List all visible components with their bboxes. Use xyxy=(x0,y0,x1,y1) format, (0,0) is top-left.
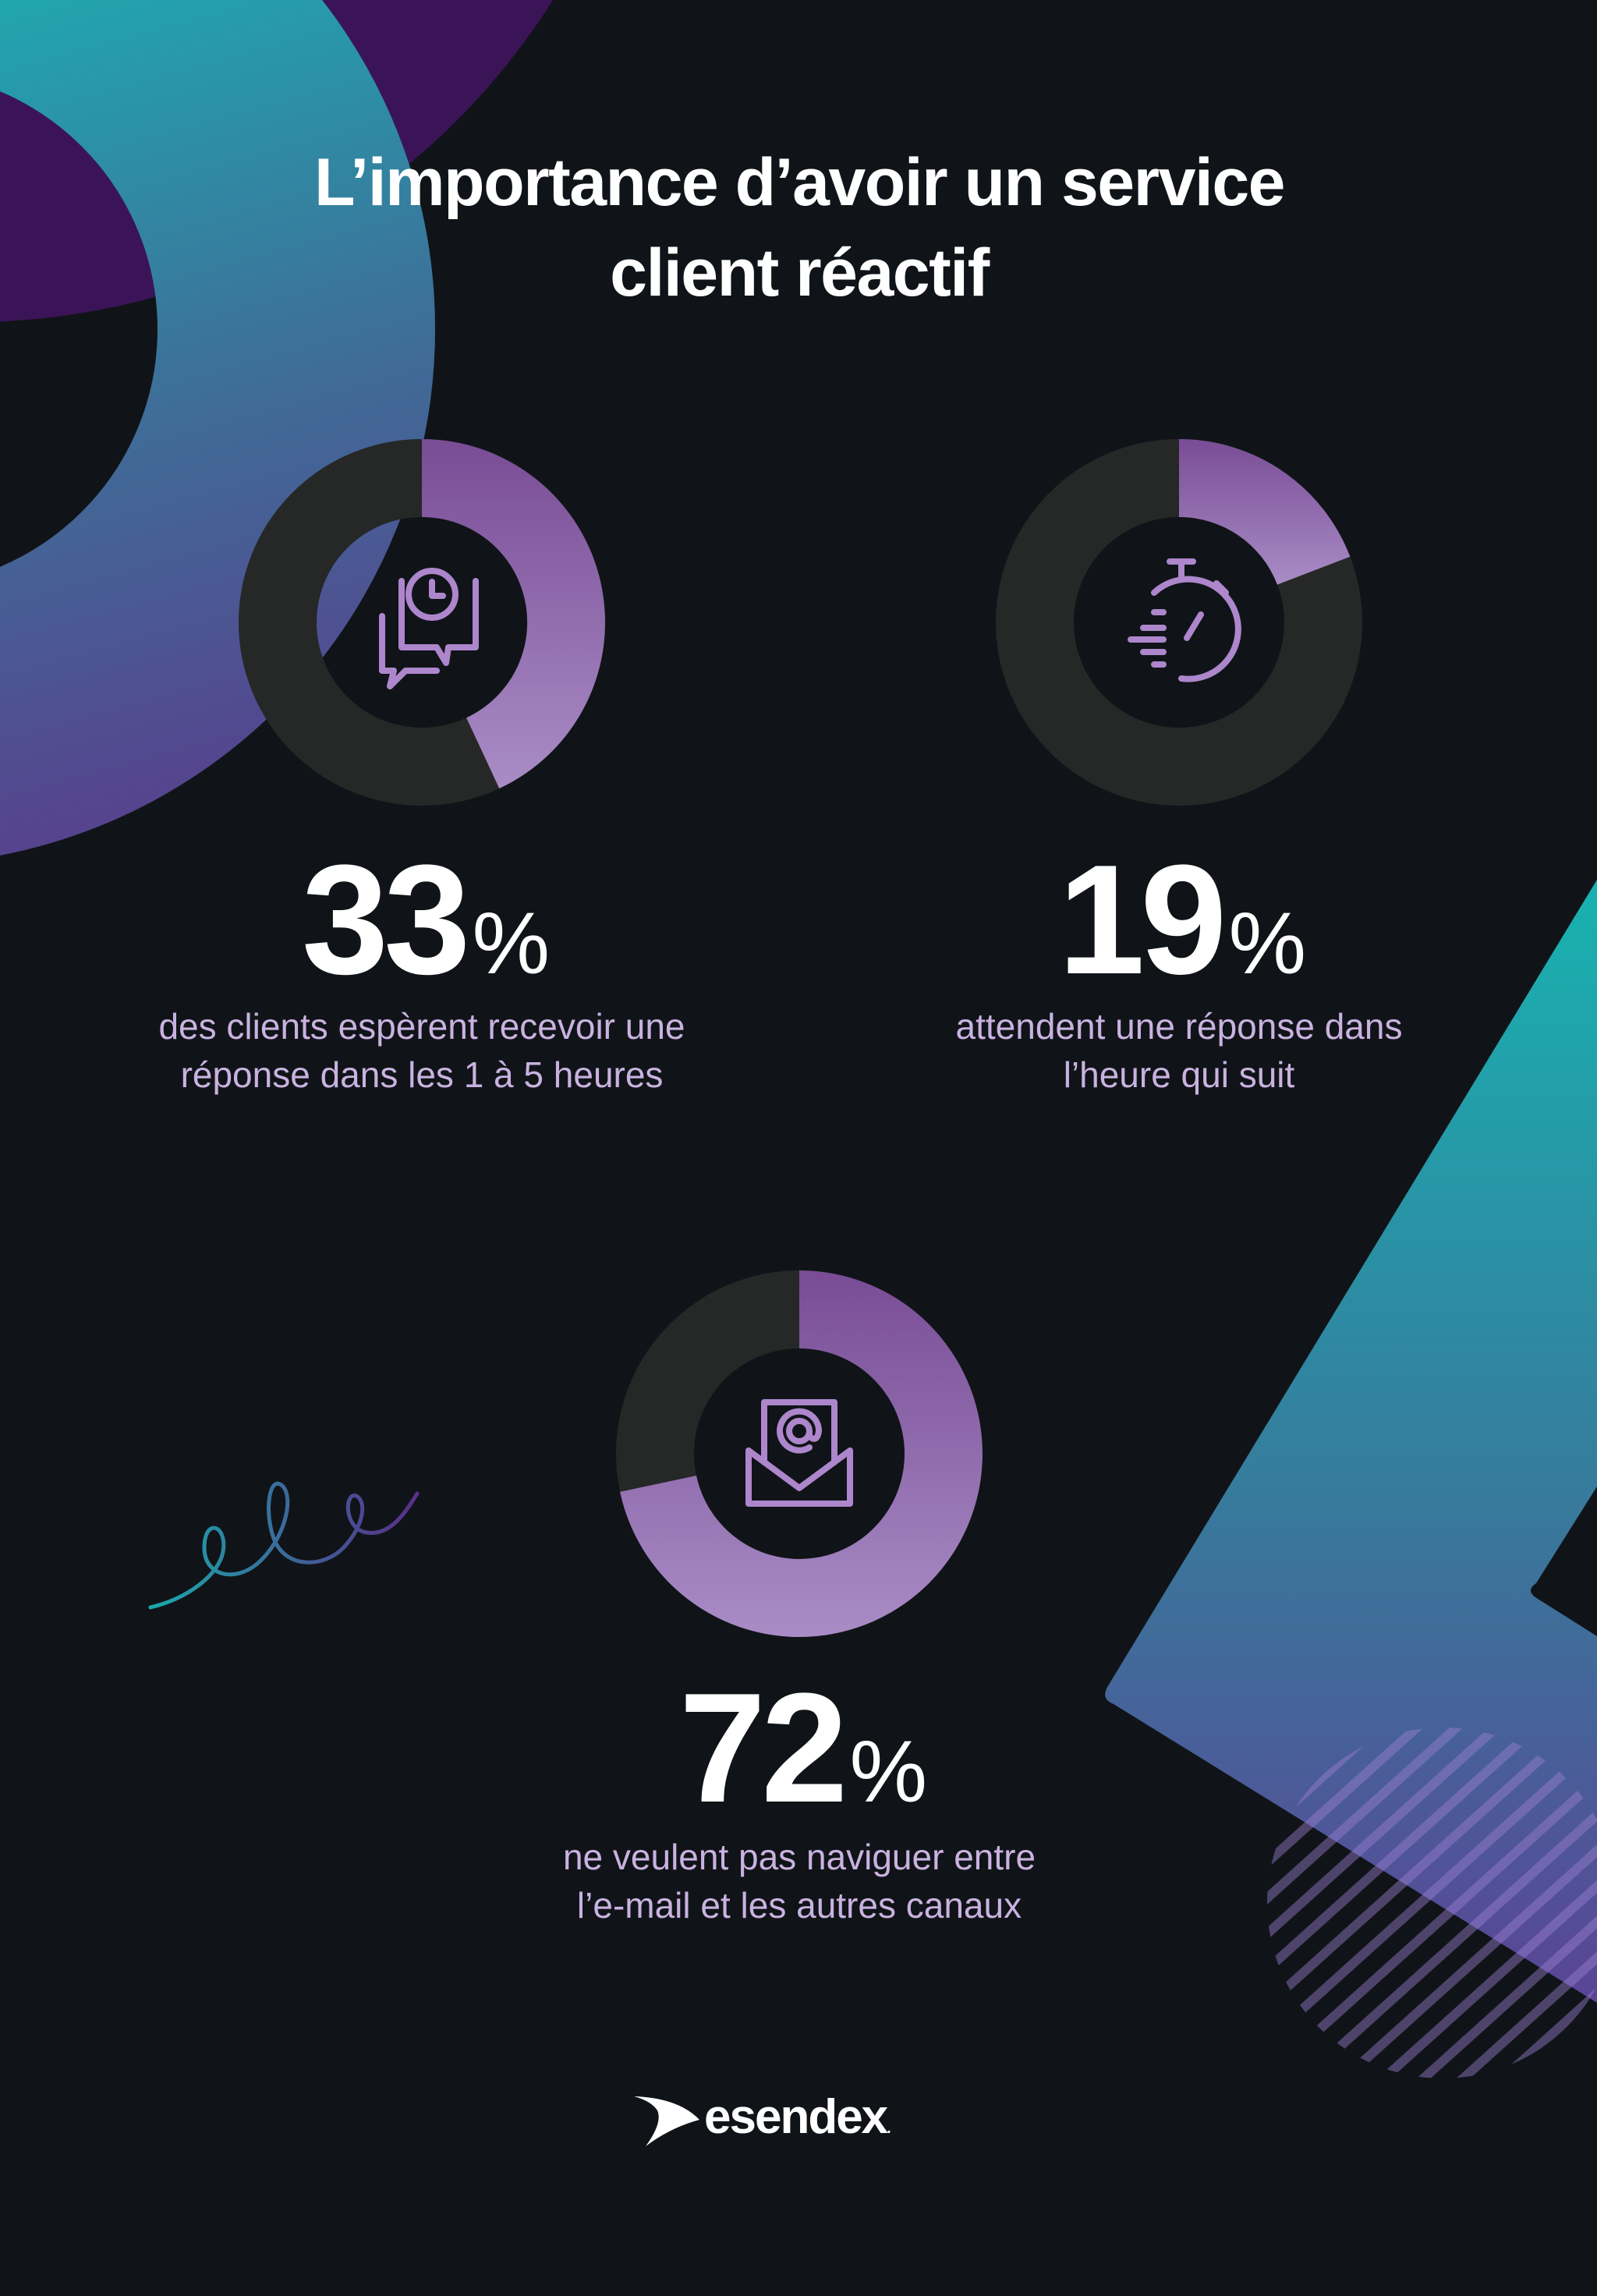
decoration: hatched circle xyxy=(1267,1727,1597,2078)
logo: esendex xyxy=(634,2090,891,2146)
donut chart: 33% xyxy=(278,439,605,788)
decoration: gradient ring top-left xyxy=(0,0,296,726)
caption: 33%: des clients espèrent recevoir une xyxy=(158,1006,685,1047)
donut chart: 72% xyxy=(620,1270,983,1637)
donut chart: 19% xyxy=(1035,439,1350,767)
decoration: squiggle xyxy=(150,1483,417,1607)
decoration: purple circle top-left xyxy=(0,0,658,322)
caption: 33%: réponse dans les 1 à 5 heures xyxy=(181,1054,663,1095)
caption: 72%: l’e-mail et les autres canaux xyxy=(577,1885,1022,1926)
caption: 72%: ne veulent pas naviguer entre xyxy=(563,1837,1036,1877)
title: client réactif xyxy=(610,236,990,310)
stat: 19%: 19% xyxy=(1058,833,1306,1007)
caption: 19%: l’heure qui suit xyxy=(1064,1054,1295,1095)
stat: 72%: 72% xyxy=(679,1661,927,1835)
caption: 19%: attendent une réponse dans xyxy=(956,1006,1402,1047)
icon: envelope @ xyxy=(749,1402,850,1504)
stat: 33%: 33% xyxy=(302,833,550,1007)
decoration: chevron shape right xyxy=(1105,880,1597,2003)
title: L’importance d’avoir un service xyxy=(314,145,1284,220)
icon: stopwatch xyxy=(1131,562,1238,679)
logo: esendex: esendex. xyxy=(704,2090,891,2144)
icon: chat clock xyxy=(382,571,476,686)
